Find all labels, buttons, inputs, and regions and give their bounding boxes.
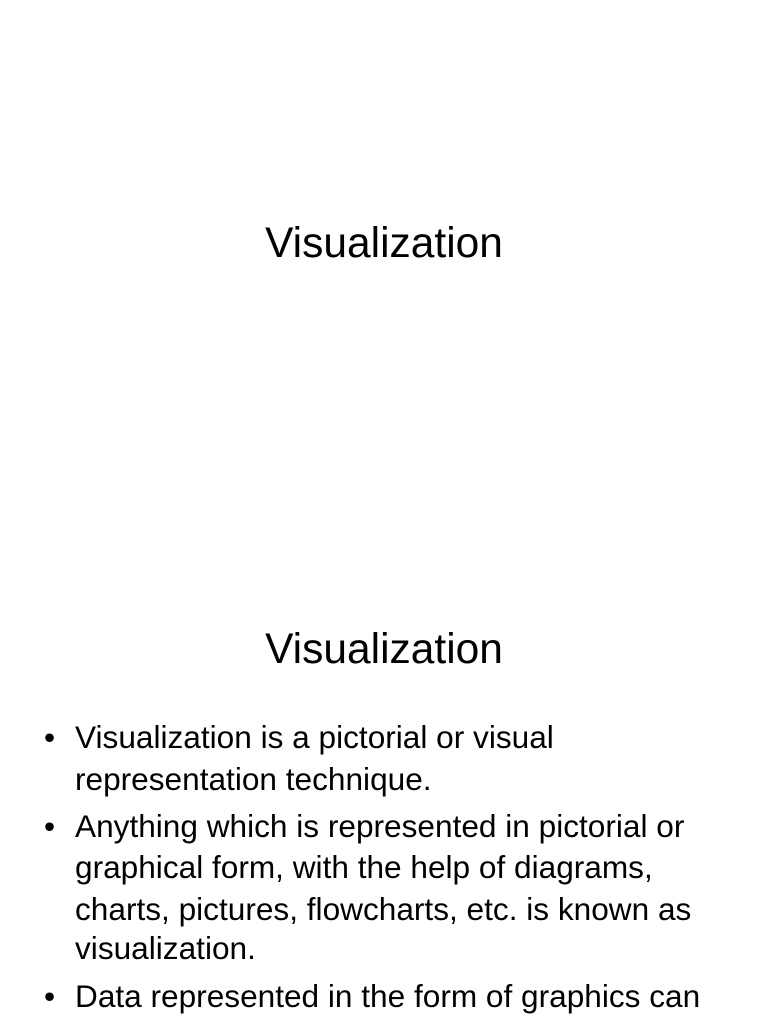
bullet 2: • [44,808,55,844]
bullet 1: representation technique. [75,761,432,797]
bullet list [44,719,700,1014]
bullet 2: visualization. [75,930,256,966]
bullet 2: charts, pictures, flowcharts, etc. is known as [75,891,691,927]
title: slide 1: Visualization [265,220,503,267]
bullet 1: • [44,719,55,755]
bullet 3: Data represented in the form of graphics can [75,978,700,1014]
bullet 2: graphical form, with the help of diagrams, [75,849,653,885]
bullet 1: Visualization is a pictorial or visual [75,719,554,755]
bullet 2: Anything which is represented in pictorial or [75,808,684,844]
bullet 3: • [44,978,55,1014]
bullet 1 [44,719,554,797]
bullet 2 [44,808,691,966]
title: slide 2: Visualization [265,626,503,673]
